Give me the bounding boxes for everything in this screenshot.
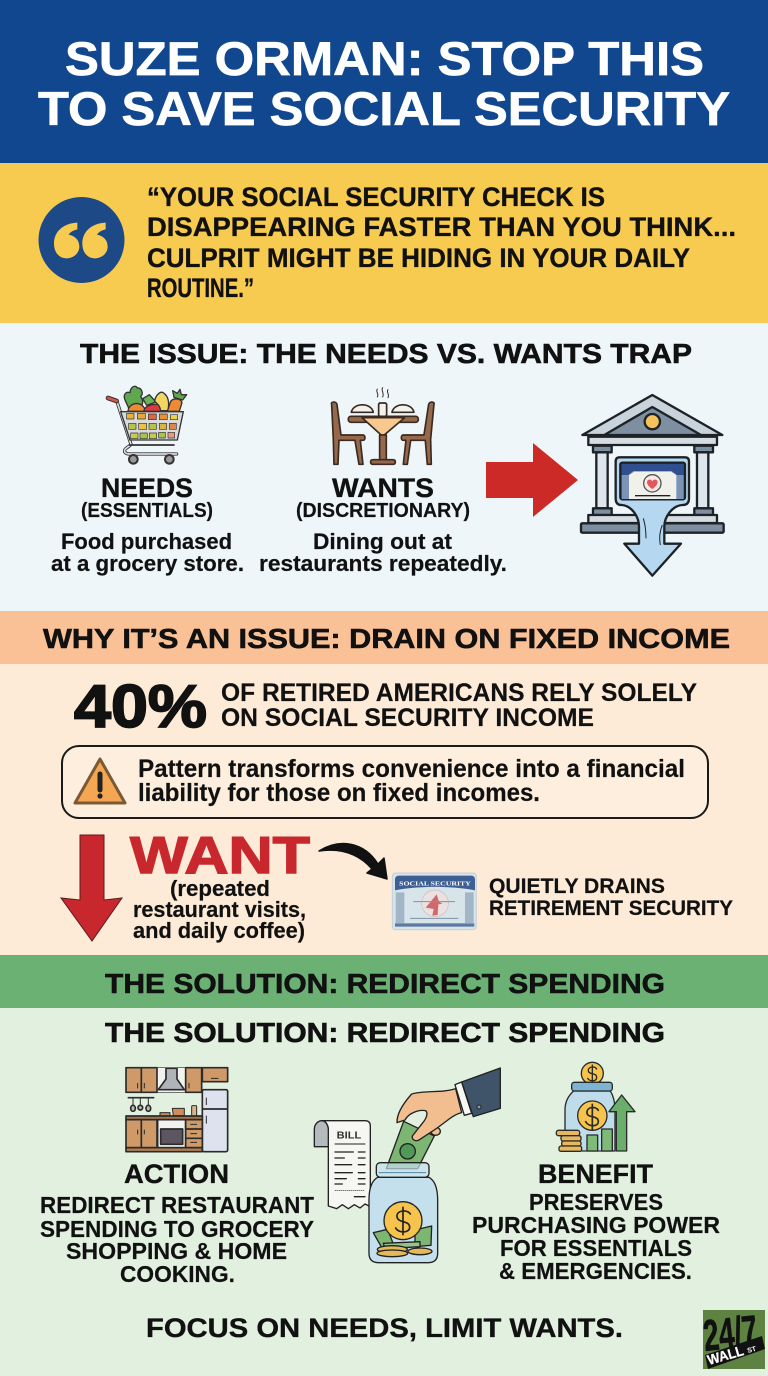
coins and cash in jar — [373, 1229, 394, 1249]
want examples — [133, 876, 306, 943]
wants text: Dining out at — [313, 529, 453, 554]
action text: SHOPPING & HOME — [66, 1238, 287, 1264]
logo: 24/7 Wall St: WALL — [705, 1342, 746, 1368]
jar neck — [376, 1163, 429, 1177]
want examples: restaurant visits, — [133, 897, 306, 922]
statistic: 40%: 40% — [74, 673, 207, 740]
quote text — [147, 182, 736, 303]
wants text — [259, 473, 507, 576]
needs text: Food purchased — [61, 529, 232, 554]
quote text: “YOUR SOCIAL SECURITY CHECK IS — [147, 182, 605, 212]
action text — [40, 1159, 314, 1287]
panel: the solution — [0, 955, 768, 1376]
text: quietly drains: QUIETLY DRAINS — [489, 875, 665, 898]
icon: warning triangle — [75, 759, 125, 803]
icon: draining bank — [581, 395, 724, 576]
benefit text: & EMERGENCIES. — [499, 1258, 692, 1284]
callout text: Pattern transforms convenience into a financial — [138, 755, 685, 783]
panel: the issue — [0, 323, 768, 611]
quote text: DISAPPEARING FASTER THAN YOU THINK... — [147, 212, 736, 242]
money bill — [386, 1121, 434, 1169]
section header band: WHY IT’S AN ISSUE: DRAIN ON FIXED INCOME — [43, 623, 730, 654]
heading: the solution: THE SOLUTION: REDIRECT SPENDING — [105, 1017, 665, 1048]
needs text: (ESSENTIALS) — [81, 500, 213, 522]
arrow: curved black — [319, 844, 387, 879]
wants text: restaurants repeatedly. — [259, 551, 507, 576]
action text: COOKING. — [120, 1261, 235, 1287]
panel: quote — [0, 163, 768, 323]
section header band — [0, 955, 768, 1008]
needs text: at a grocery store. — [51, 551, 244, 576]
icon: savings growth jar — [556, 1062, 635, 1151]
wants text: (DISCRETIONARY) — [296, 500, 470, 522]
callout — [62, 746, 708, 818]
statistic description — [221, 679, 697, 732]
wants text: WANTS — [332, 473, 434, 503]
icon: shopping cart — [108, 386, 187, 464]
callout text — [138, 755, 685, 807]
arrow: red right — [486, 443, 578, 517]
action text: SPENDING TO GROCERY — [40, 1216, 314, 1242]
statistic description: OF RETIRED AMERICANS RELY SOLELY — [221, 679, 697, 707]
benefit text: BENEFIT — [538, 1159, 653, 1189]
quote text: ROUTINE.” — [147, 273, 254, 303]
suit sleeve — [462, 1068, 500, 1117]
title: SUZE ORMAN: STOP THIS — [65, 32, 704, 85]
arrow: red down — [61, 835, 122, 941]
action text: ACTION — [124, 1159, 229, 1189]
callout text: liability for those on fixed incomes. — [138, 779, 540, 807]
heading: the issue: THE ISSUE: THE NEEDS VS. WANTS TRAP — [80, 338, 692, 369]
panel: title banner — [0, 0, 768, 163]
title — [38, 32, 730, 135]
needs text: NEEDS — [101, 473, 193, 503]
shirt cuff — [455, 1082, 472, 1115]
section header band: THE SOLUTION: REDIRECT SPENDING — [105, 968, 665, 999]
icon: quotation mark — [38, 197, 124, 283]
panel: why it's an issue — [0, 611, 768, 955]
want examples: and daily coffee) — [133, 918, 305, 943]
bill receipt — [314, 1121, 370, 1209]
logo: 24/7 Wall St: ST — [747, 1346, 758, 1355]
word: WANT: WANT — [130, 827, 310, 885]
statistic description: ON SOCIAL SECURITY INCOME — [221, 704, 594, 732]
icon: social security card — [392, 873, 476, 930]
benefit text: FOR ESSENTIALS — [500, 1235, 692, 1261]
icon: kitchen — [126, 1068, 228, 1152]
section header band — [0, 611, 768, 664]
icon: hand dropping money into jar with bill — [314, 1068, 500, 1263]
quote text: CULPRIT MIGHT BE HIDING IN YOUR DAILY — [147, 243, 690, 273]
bill receipt: BILL — [337, 1130, 361, 1141]
want examples: (repeated — [170, 876, 270, 901]
needs text — [51, 473, 244, 576]
benefit text — [472, 1159, 720, 1284]
hand — [431, 1127, 440, 1135]
action text: REDIRECT RESTAURANT — [40, 1192, 314, 1218]
text: quietly drains — [489, 875, 733, 920]
icon: social security card: SOCIAL SECURITY — [399, 881, 471, 888]
title: TO SAVE SOCIAL SECURITY — [38, 82, 730, 135]
closing message: FOCUS ON NEEDS, LIMIT WANTS. — [146, 1313, 623, 1343]
icon: restaurant table — [331, 388, 434, 464]
jar — [369, 1177, 438, 1263]
benefit text: PURCHASING POWER — [472, 1212, 720, 1238]
text: quietly drains: RETIREMENT SECURITY — [489, 897, 733, 920]
benefit text: PRESERVES — [529, 1189, 663, 1215]
